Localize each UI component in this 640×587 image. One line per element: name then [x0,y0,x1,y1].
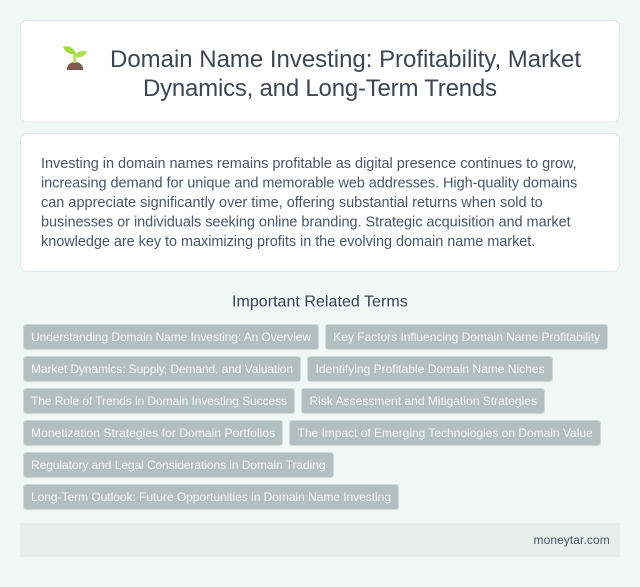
panel: introduction text: knowledge are key to maximizing profits in the evolving domain name market. [41,234,535,250]
tag: trends: The Role of Trends in Domain Investing Success [31,394,287,408]
tag: market dynamics [24,356,300,382]
tag: monetization: Monetization Strategies for Domain Portfolios [31,426,275,440]
title [110,46,581,102]
tag: long-term outlook [24,484,398,510]
tag: regulatory: Regulatory and Legal Considerations in Domain Trading [31,458,326,472]
tag: long-term outlook: Long-Term Outlook: Future Opportunities in Domain Name Investing [31,490,391,504]
tag: niches [308,356,552,382]
footer source: moneytar.com [534,533,610,547]
tag: risk [302,388,544,414]
panel: introduction text: can appreciate significantly over time, offering substantial returns when sold to [41,195,543,211]
tag: emerging technologies: The Impact of Emerging Technologies on Domain Value [298,426,593,440]
title: Dynamics, and Long-Term Trends [143,75,497,102]
icon: seedling [63,46,87,70]
panel: introduction text: increasing demand for unique and memorable web addresses. High-quality domains [41,176,577,192]
panel: introduction text [20,134,620,272]
tag: market dynamics: Market Dynamics: Supply, Demand, and Valuation [31,362,293,376]
title: Domain Name Investing: Profitability, Market [110,46,581,73]
tag: overview: Understanding Domain Name Investing: An Overview [31,330,311,344]
footer [20,523,620,557]
panel: introduction text: businesses or individuals seeking online branding. Strategic acquisition and market [41,214,571,230]
tag: overview [24,324,318,350]
tag: monetization [24,420,282,446]
heading: related terms: Important Related Terms [232,294,408,310]
tag: niches: Identifying Profitable Domain Name Niches [316,362,544,376]
tag: regulatory [24,452,334,478]
tag: trends [24,388,294,414]
panel: introduction text: Investing in domain names remains profitable as digital presence continues to grow, [41,156,577,172]
tag list [24,324,608,510]
tag: emerging technologies [290,420,600,446]
tag: risk: Risk Assessment and Mitigation Strategies [310,394,537,408]
tag: key factors: Key Factors Influencing Domain Name Profitability [333,330,600,344]
tag: key factors [326,324,608,350]
panel: header card [20,20,620,122]
